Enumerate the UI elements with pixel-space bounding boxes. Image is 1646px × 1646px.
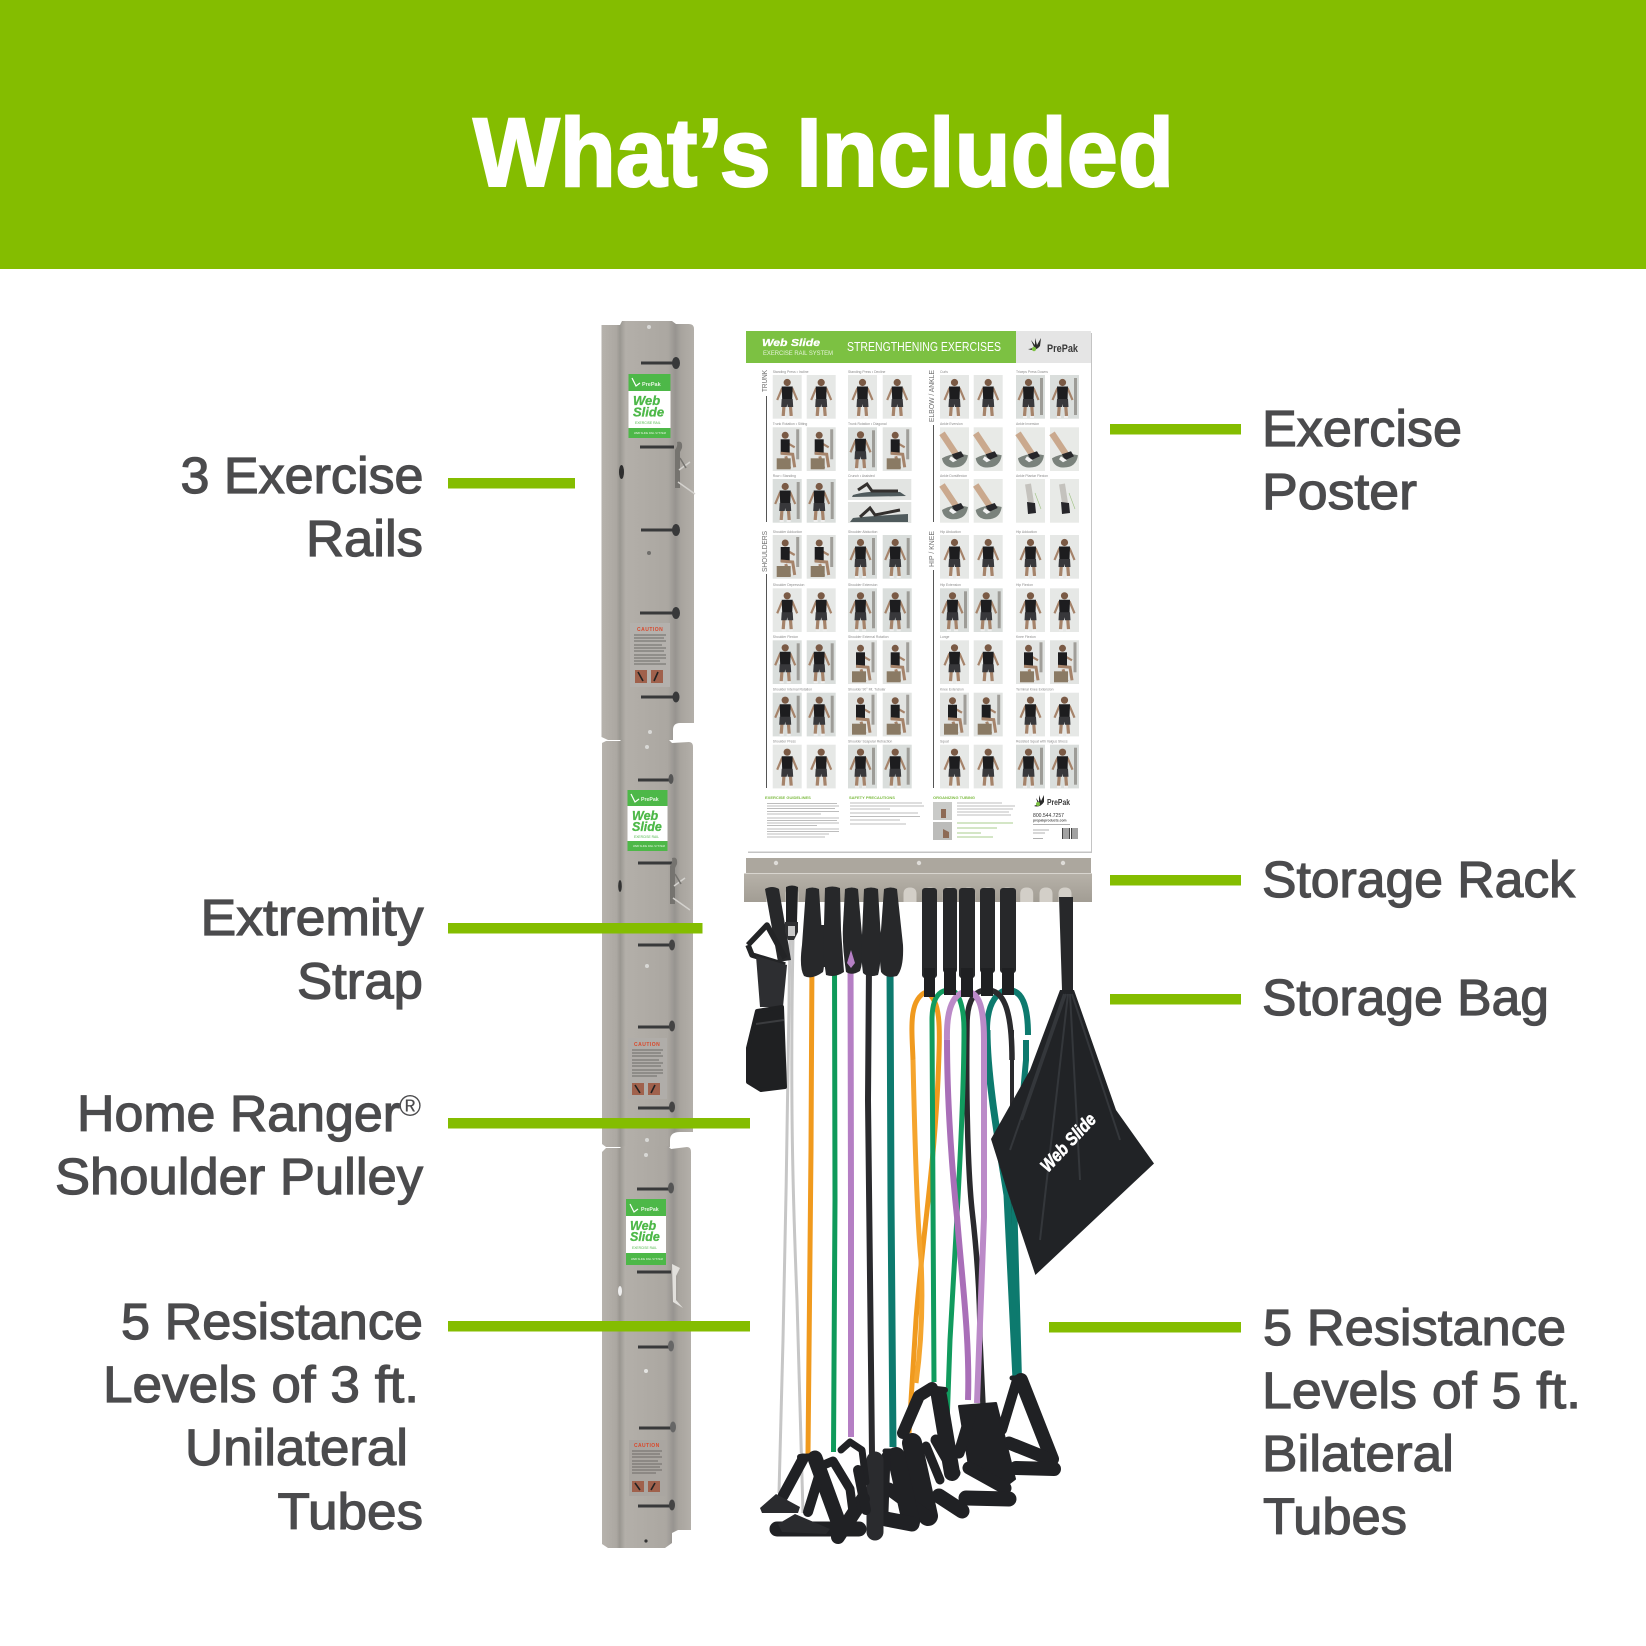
label: 5 Resistance Levels of 5 ft. Bilateral Tubes: Bilateral	[1262, 1425, 1454, 1482]
poster exercise names: Crunch • Assisted	[848, 474, 875, 478]
poster exercise names: Triceps Press Downs	[1016, 370, 1048, 374]
label: Home Ranger Shoulder Pulley	[55, 1085, 424, 1205]
5 ft teal handle	[1002, 1378, 1054, 1469]
rail 1 product label	[628, 374, 670, 438]
label: 5 Resistance Levels of 5 ft. Bilateral Tubes: Levels of 5 ft.	[1262, 1362, 1581, 1419]
5 ft bilateral tubes	[909, 990, 1028, 1433]
poster exercise names: Row • Standing	[773, 474, 796, 478]
poster footer logo and contact	[1033, 795, 1077, 839]
5 ft tube straps	[922, 888, 1016, 997]
poster footer guidelines: SAFETY PRECAUTIONS	[849, 795, 895, 800]
5 ft green handle	[903, 1388, 962, 1511]
poster exercise names: Ankle Eversion	[940, 422, 963, 426]
label: Exercise Poster: Poster	[1262, 463, 1417, 520]
label: 5 Resistance Levels of 5 ft. Bilateral Tubes: 5 Resistance	[1263, 1299, 1566, 1356]
poster exercise names: Standing Press • Decline	[848, 370, 885, 374]
5 ft purple and black handles	[959, 1403, 1015, 1499]
poster header: PrePak	[1047, 343, 1079, 355]
label: 5 Resistance Levels of 3 ft. Unilateral Tubes: Tubes	[278, 1483, 423, 1540]
3 ft unilateral tubes	[808, 950, 893, 1454]
3 ft purple handle	[838, 1442, 866, 1537]
label: Home Ranger Shoulder Pulley: Home Ranger	[77, 1085, 400, 1142]
rail 1 product label: PrePak	[642, 382, 662, 388]
poster footer guidelines	[765, 795, 1015, 840]
rail 1 caution label: CAUTION	[637, 627, 663, 633]
extremity strap	[748, 887, 791, 1090]
rail 2 product label: PrePak	[641, 797, 659, 803]
poster exercise names	[773, 370, 1068, 744]
poster exercise names: Hip Flexion	[1016, 583, 1033, 587]
label: Exercise Poster: Exercise	[1262, 400, 1462, 457]
label: Home Ranger Shoulder Pulley: ®	[399, 1090, 421, 1123]
rail 2 product label: Web	[632, 809, 659, 823]
label: 3 Exercise Rails	[180, 447, 424, 567]
label: Exercise Poster	[1262, 400, 1462, 520]
poster exercise names: Trunk Rotation • Diagonal	[848, 422, 887, 426]
rail 3 product label	[626, 1199, 666, 1265]
poster exercise names: Resisted Squat with Valgus Stress	[1016, 740, 1068, 744]
rail 2 product label: EXERCISE RAIL	[634, 835, 659, 839]
poster exercise names: Shoulder Press	[773, 740, 796, 744]
poster exercise names: Hip Extension	[940, 583, 961, 587]
poster exercise names: Shoulder Depression	[773, 583, 804, 587]
rail 3 product label: PrePak	[641, 1207, 659, 1213]
poster footer logo and contact: prepakproducts.com	[1033, 818, 1067, 822]
poster exercise names: Shoulder Internal Rotation	[773, 688, 812, 692]
tubes and pulley	[779, 940, 1028, 1513]
exercise poster	[746, 331, 1092, 853]
rail 1 product label: Slide	[633, 404, 664, 420]
3 ft green handle	[826, 1461, 853, 1512]
label: 3 Exercise Rails: Rails	[306, 510, 423, 567]
poster section labels: HIP / KNEE	[927, 531, 936, 567]
rail 3 caution label: CAUTION	[634, 1443, 660, 1449]
rail 2 caution label	[628, 1038, 667, 1099]
storage rack	[744, 858, 1092, 902]
title: What’s Included	[473, 98, 1174, 207]
rail 1 product label: EXERCISE RAIL	[635, 421, 661, 425]
poster header: STRENGTHENING EXERCISES	[847, 340, 1001, 354]
poster exercise names: Hip Adduction	[1016, 530, 1037, 534]
label: Storage Bag: Storage Bag	[1262, 969, 1549, 1026]
poster exercise names: Lunge	[940, 635, 950, 639]
exercise handles	[760, 1378, 1054, 1537]
exercise rails	[602, 321, 695, 1548]
rail 3 product label: Web	[630, 1219, 657, 1233]
poster exercise names: Hip Abduction	[940, 530, 961, 534]
poster exercise names: Standing Press • Incline	[773, 370, 809, 374]
label: 5 Resistance Levels of 5 ft. Bilateral Tubes	[1262, 1299, 1581, 1545]
pulley rope	[779, 940, 803, 1513]
3 ft black handle	[866, 1460, 884, 1532]
poster exercise names: Knee Extension	[940, 688, 964, 692]
rail 3 caution label	[629, 1440, 666, 1496]
5 ft orange handle	[889, 1443, 940, 1516]
poster section labels: TRUNK	[760, 370, 769, 392]
poster exercise names: Trunk Rotation • Sitting	[773, 422, 807, 426]
poster footer logo and contact: 800.544.7257	[1033, 813, 1064, 819]
poster exercise names: Shoulder Extension	[848, 583, 878, 587]
rail 1 product label: Web	[633, 393, 660, 408]
rail 3	[602, 1146, 691, 1548]
3 ft tube straps	[801, 886, 903, 977]
rail 3 product label: Slide	[630, 1230, 660, 1244]
poster exercise names: Ankle Plantar Flexion	[1016, 474, 1048, 478]
header band	[0, 0, 1646, 269]
poster section labels	[760, 370, 936, 788]
rail 2 product label: Slide	[632, 820, 662, 834]
rail 2 caution label: CAUTION	[634, 1042, 660, 1048]
label: Extremity Strap: Extremity	[200, 889, 424, 946]
poster exercise names: Curls	[940, 370, 948, 374]
label: 5 Resistance Levels of 5 ft. Bilateral Tubes: Tubes	[1263, 1488, 1407, 1545]
rail 3 product label: EXERCISE RAIL	[632, 1246, 657, 1250]
poster exercise names: Knee Flexion	[1016, 635, 1036, 639]
poster exercise names: Shoulder 90° Mt. Tubular	[848, 688, 886, 692]
poster exercise names: Ankle Dorsiflexion	[940, 474, 967, 478]
rail 2 product label: WEB SLIDE RAIL SYSTEM	[633, 844, 665, 848]
poster exercise names: Shoulder External Rotation	[848, 635, 889, 639]
poster section labels: ELBOW / ANKLE	[927, 370, 936, 422]
storage bag: Web Slide	[1036, 1109, 1100, 1176]
rail 1 product label: WEB SLIDE RAIL SYSTEM	[634, 431, 666, 435]
rail 3 product label: WEB SLIDE RAIL SYSTEM	[631, 1257, 663, 1261]
poster exercise names: Shoulder Scapular Retraction	[848, 740, 892, 744]
home ranger pulley clip	[785, 886, 798, 940]
poster header: Web Slide	[762, 337, 820, 349]
tube straps on rack	[801, 886, 1016, 997]
label: Extremity Strap: Strap	[297, 952, 423, 1010]
poster header: EXERCISE RAIL SYSTEM	[763, 350, 833, 357]
poster exercise names: Ankle Inversion	[1016, 422, 1039, 426]
poster exercise photo grid	[773, 375, 1079, 788]
storage bag	[991, 897, 1154, 1275]
3 ft orange handle	[777, 1456, 859, 1529]
pulley handles	[760, 1494, 830, 1534]
label: Storage Rack: Storage Rack	[1262, 851, 1575, 908]
label: 5 Resistance Levels of 3 ft. Unilateral Tubes: 5 Resistance	[121, 1293, 423, 1350]
poster exercise names: Shoulder Flexion	[773, 635, 798, 639]
label: 3 Exercise Rails: 3 Exercise	[180, 447, 424, 504]
label: 5 Resistance Levels of 3 ft. Unilateral Tubes: Unilateral	[185, 1419, 408, 1476]
leader bars	[448, 424, 1241, 1332]
poster exercise names: Shoulder Adduction	[773, 530, 802, 534]
label: 5 Resistance Levels of 3 ft. Unilateral Tubes: Levels of 3 ft.	[103, 1356, 419, 1413]
poster exercise names: Shoulder Abduction	[848, 530, 878, 534]
poster exercise names: Squat	[940, 740, 949, 744]
rail 2	[602, 739, 693, 1147]
poster footer guidelines: ORGANIZING TUBING	[933, 795, 975, 800]
rail 1 caution label	[630, 623, 670, 687]
rail 1	[602, 321, 695, 740]
3 ft teal handle	[884, 1451, 912, 1524]
rail 2 product label	[628, 790, 668, 851]
label: 5 Resistance Levels of 3 ft. Unilateral Tubes	[103, 1293, 423, 1540]
poster footer guidelines: EXERCISE GUIDELINES	[765, 795, 811, 800]
label: Extremity Strap	[200, 889, 424, 1010]
poster footer logo and contact: PrePak	[1047, 798, 1070, 807]
poster header	[746, 331, 1091, 363]
label: Home Ranger Shoulder Pulley: Shoulder Pulley	[55, 1148, 424, 1205]
poster exercise names: Terminal Knee Extension	[1016, 688, 1054, 692]
poster section labels: SHOULDERS	[760, 531, 769, 572]
